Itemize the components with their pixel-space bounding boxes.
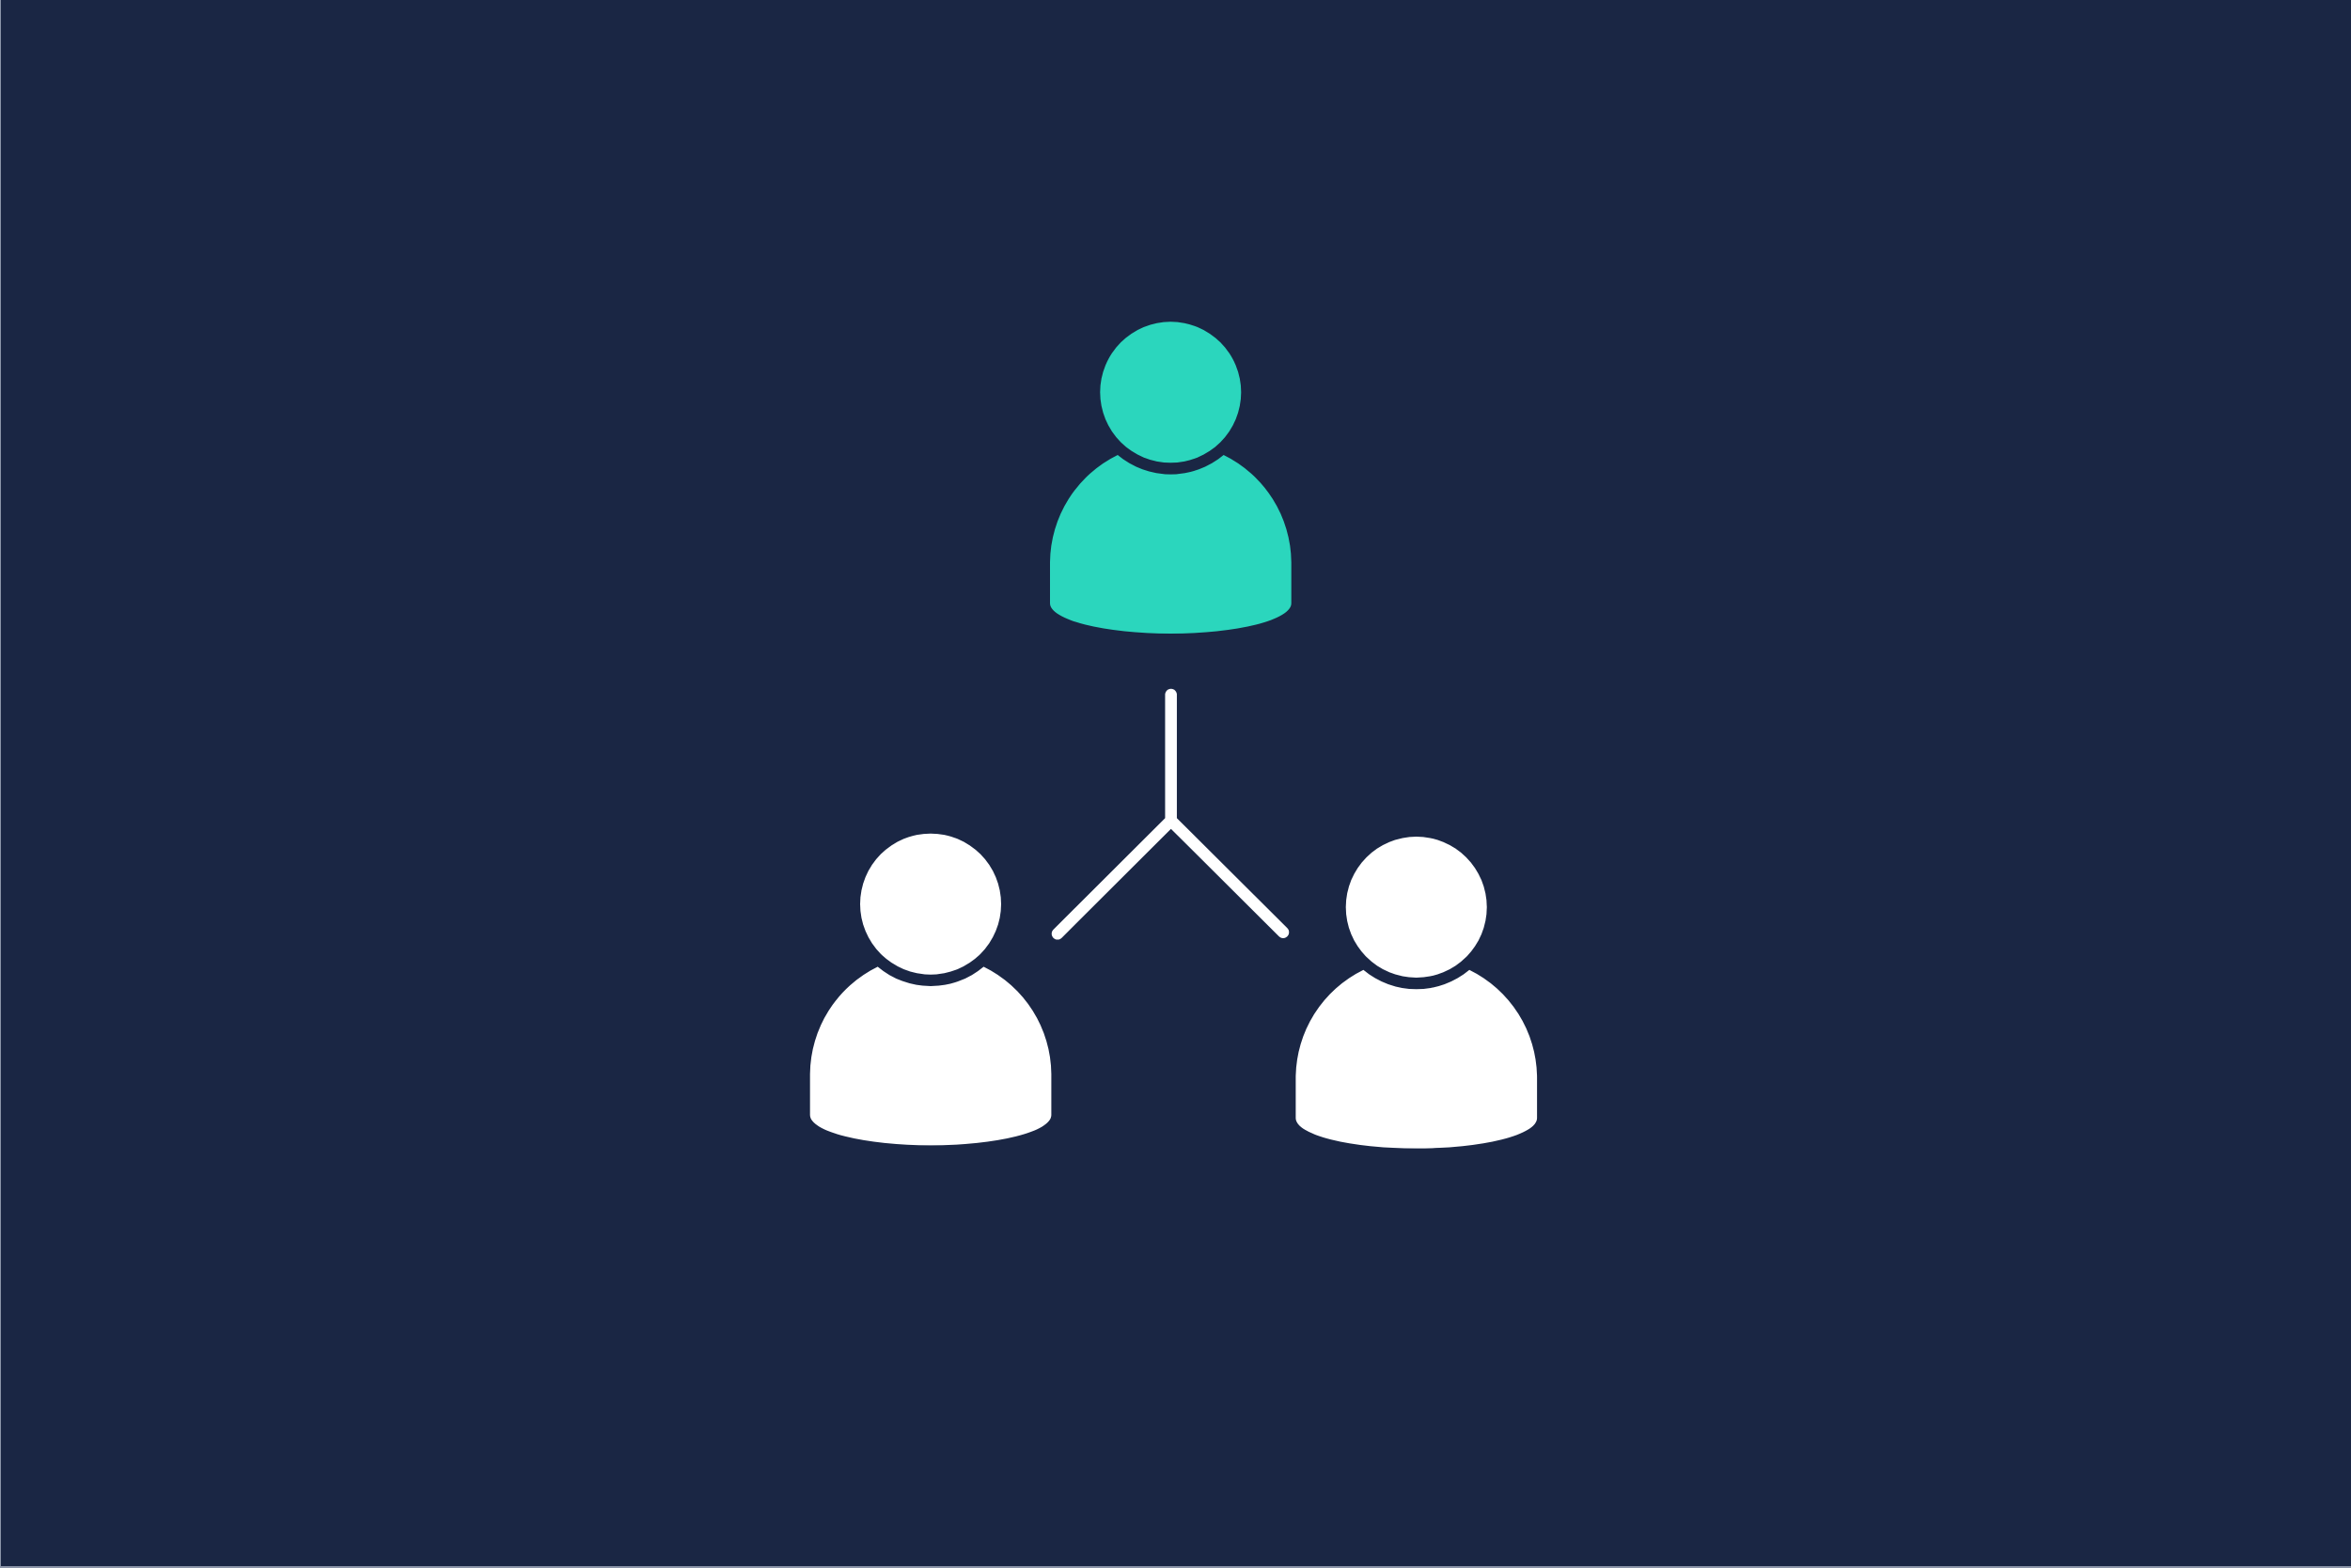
icon: branching connector: [1058, 695, 1283, 933]
icon: white person, bottom right: [1295, 837, 1537, 1149]
icon: teal lead person: [1050, 321, 1292, 634]
icon: white person, bottom left: [810, 834, 1051, 1145]
